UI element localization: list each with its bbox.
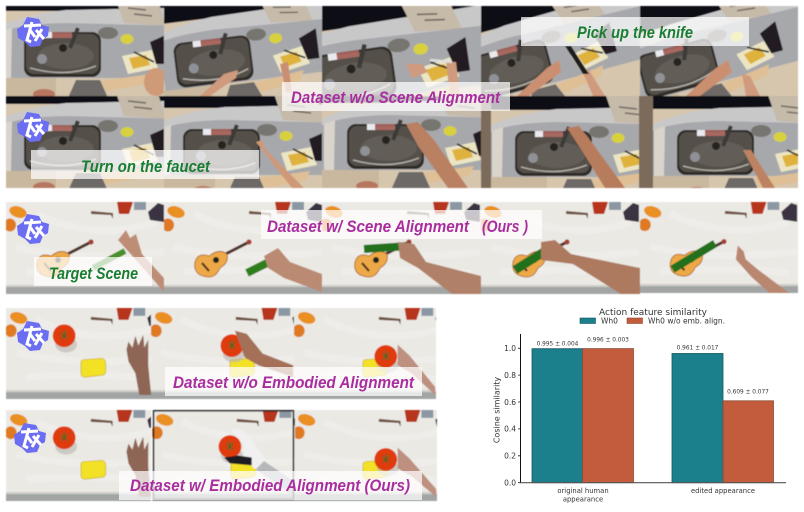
legend — [580, 316, 725, 326]
panel: dataset without scene alignment, kitchen sink frames — [0, 0, 804, 255]
frame: sink row 2 frame 2 with arm — [163, 95, 323, 189]
icon: logo row 2 — [17, 112, 49, 142]
y axis ticks and labels: 1.0 — [504, 344, 516, 353]
panel: dataset with embodied alignment, robot hand frames — [0, 410, 473, 501]
icon: logo row 4 — [17, 321, 49, 351]
frame: table row 3 frame 2 — [163, 201, 323, 294]
value labels: 0.995 ± 0.004 — [537, 341, 579, 347]
label: Pick up the knife: Pick up the knife — [577, 23, 693, 42]
y axis ticks and labels: 0.8 — [504, 371, 516, 380]
label: Dataset w/ Scene Alignment (Ours): (Ours ) — [482, 217, 528, 236]
icon: logo row 1 — [17, 17, 49, 47]
frame: sink row 1 frame 3 with knife — [321, 5, 482, 97]
legend: Wh0 w/o emb. align. — [648, 316, 725, 326]
frame: table row 3 frame 5 — [639, 201, 798, 294]
y axis ticks and labels: 0.4 — [504, 424, 516, 434]
x axis labels: appearance — [563, 496, 603, 504]
label: Dataset w/o Embodied Alignment — [165, 367, 422, 396]
x axis labels: edited appearance — [691, 487, 755, 495]
frame: tomato row 4 frame 3 — [293, 307, 437, 400]
value labels: 0.961 ± 0.017 — [677, 345, 719, 351]
icon: logo row 3 — [17, 214, 49, 244]
y axis ticks and labels: 0.0 — [504, 478, 516, 488]
x axis labels: original human — [557, 487, 609, 495]
frame: sink row 1 frame 2 with hands — [163, 5, 323, 97]
chart title: Action feature similarity — [599, 308, 708, 318]
bars: original human appearance — [532, 349, 634, 483]
label: Dataset w/o Embodied Alignment: Dataset w/o Embodied Alignment — [173, 373, 415, 392]
axes — [520, 334, 522, 483]
frame: tomato row 5 frame 1 — [5, 409, 152, 502]
x axis labels — [557, 487, 755, 504]
frame: table row 3 frame 3 — [321, 201, 482, 295]
label: Dataset w/ Embodied Alignment (Ours) — [119, 471, 422, 500]
y axis ticks and labels: 0.6 — [504, 398, 516, 407]
value labels: 0.609 ± 0.077 — [727, 389, 769, 395]
panel: dataset without embodied alignment, tomato frames — [0, 308, 473, 399]
frame: sink row 1 frame 1 — [5, 5, 165, 97]
value labels: 0.996 ± 0.003 — [587, 337, 629, 343]
frame: sink row 1 frame 5 — [639, 5, 798, 97]
y axis ticks and labels — [504, 344, 520, 488]
label: Dataset w/o Scene Alignment: Dataset w/o Scene Alignment — [291, 88, 501, 107]
label: Target Scene — [34, 257, 152, 286]
label: Dataset w/o Scene Alignment — [282, 82, 510, 111]
frame: table row 3 frame 1 — [5, 201, 165, 294]
frame: sink row 1 frame 4 with knife — [480, 5, 641, 97]
panel: dataset with scene alignment, guitar and cucumber frames — [0, 202, 804, 294]
frame: sink row 2 frame 3 with arm — [321, 96, 482, 189]
label: Pick up the knife — [521, 17, 749, 46]
frame: tomato row 5 frame 3 — [294, 409, 438, 502]
label: Target Scene: Target Scene — [49, 264, 138, 283]
label: Dataset w/ Scene Alignment (Ours): Dataset w/ Scene Alignment — [267, 217, 470, 236]
y axis ticks and labels: 0.2 — [504, 452, 516, 460]
label: Turn on the faucet: Turn on the faucet — [81, 157, 211, 176]
label: Dataset w/ Embodied Alignment (Ours): Dataset w/ Embodied Alignment (Ours) — [130, 476, 410, 495]
label: Dataset w/ Scene Alignment (Ours) — [261, 210, 542, 239]
bars: edited appearance — [672, 354, 774, 483]
frame: sink row 2 frame 1 — [5, 95, 165, 189]
value labels — [537, 337, 769, 395]
frame: robot hand holding tomato, black outline — [151, 409, 296, 502]
legend: Wh0 — [601, 316, 618, 326]
frame: table row 3 frame 4 — [480, 201, 641, 295]
frame: sink row 2 frame 5 with arm — [638, 95, 799, 189]
frame: tomato row 4 frame 1 — [5, 307, 152, 400]
icon: logo row 5 — [14, 423, 46, 453]
frame: tomato row 4 frame 2 held in hand — [150, 307, 295, 400]
bar chart: action feature similarity — [492, 308, 786, 504]
y axis title: Cosine similarity — [492, 377, 502, 443]
frame: sink row 2 frame 4 with arm — [480, 95, 640, 189]
label: Turn on the faucet — [31, 150, 259, 179]
